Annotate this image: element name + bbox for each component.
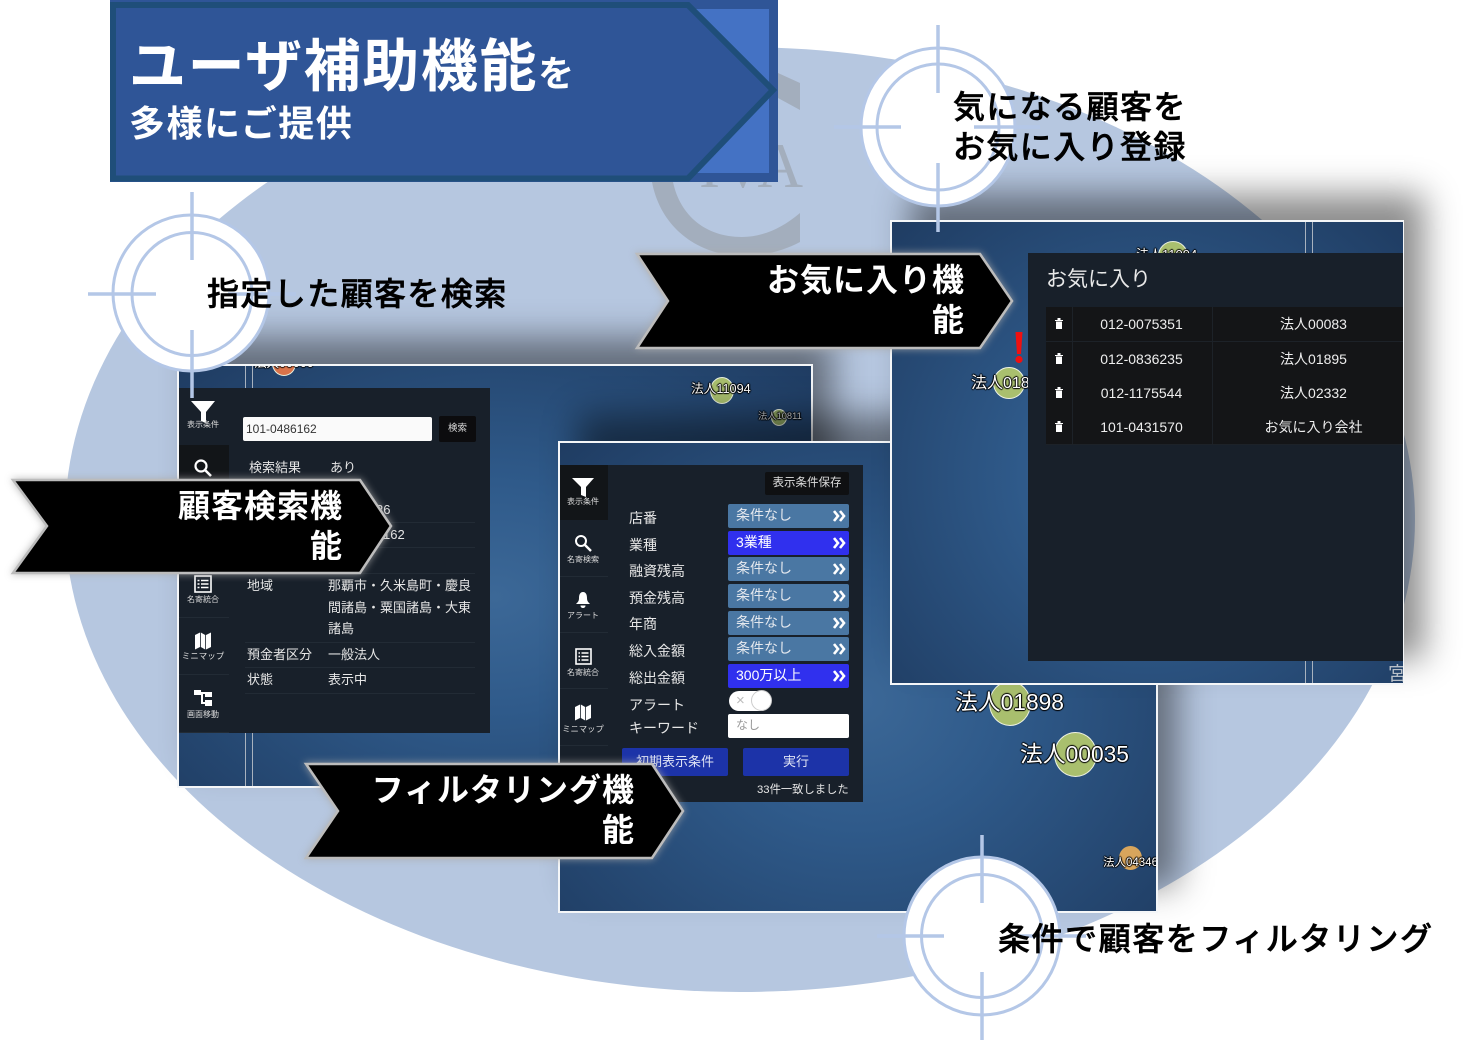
panel: filtering screenshot: アラート [629, 697, 685, 713]
map road lines [245, 364, 253, 789]
toggle knob [751, 690, 772, 711]
panel: filtering screenshot: 総出金額 [629, 670, 685, 686]
map marker: orange [272, 351, 296, 376]
icon: funnel [572, 478, 594, 497]
sidebar dividers [179, 617, 229, 618]
callout: favourites: お気に入り登録 [953, 129, 1187, 165]
icon: map [195, 632, 211, 650]
map label: 法人01898: 法人01898 [955, 689, 1064, 715]
favourites row 3 [1046, 376, 1403, 411]
search button: 検索 [448, 423, 467, 434]
map marker: 法人01898 [989, 681, 1031, 726]
search input [243, 417, 432, 441]
favourites row 2 [1046, 342, 1403, 377]
target circle: filtering [904, 835, 1086, 1040]
panel: filtering screenshot: 条件なし [736, 560, 792, 576]
filter option buttons [728, 504, 849, 528]
sidebar label: display conditions: 表示条件 [567, 497, 599, 506]
map label: 法人018: 法人01895 [971, 375, 1048, 392]
sidebar label: alert: アラート [567, 611, 599, 620]
sidebar label: name merge: 名寄統合 [567, 668, 599, 677]
favourites row 2: 012-0836235 [1100, 351, 1183, 367]
sidebar label: minimap: ミニマップ [562, 724, 604, 734]
panel: customer search screenshot: 地域 [247, 578, 273, 593]
search input: 101-0486162 [246, 422, 317, 436]
reset button: 初期表示条件 [636, 754, 714, 769]
panel: filtering screenshot: 預金残高 [629, 590, 685, 606]
map marker: 法人10811 [771, 409, 787, 426]
map marker: top [1158, 241, 1188, 271]
panel: filtering screenshot: 業種 [629, 537, 657, 553]
filter option buttons: 条件なし [736, 507, 792, 523]
favourites row 3: 法人02332 [1280, 385, 1347, 401]
title sub text: 多様にご提供 [129, 103, 353, 144]
favourites row 4 [1046, 410, 1403, 445]
icon: list [194, 575, 212, 593]
filter sidebar active item [560, 465, 608, 520]
keyword input [728, 714, 849, 738]
callout: search: 指定した顧客を検索 [207, 276, 508, 312]
map road lines [1305, 220, 1313, 690]
favourites row 4: 101-0431570 [1100, 419, 1183, 435]
title banner [110, 0, 778, 182]
callout: filtering: 条件で顧客をフィルタリング [998, 921, 1434, 957]
icon: search [575, 535, 592, 552]
panel: customer search screenshot: 表示中 [328, 672, 367, 687]
keyword input: なし [736, 718, 760, 732]
alert exclamation [1015, 332, 1023, 364]
panel: customer search screenshot: あり [330, 460, 356, 475]
alert toggle: × [736, 692, 745, 709]
panel: filtering screenshot: 総入金額 [629, 643, 685, 659]
icon: list [575, 648, 592, 665]
panel: customer search screenshot: 諸島 [328, 621, 354, 636]
panel: filtering screenshot [558, 441, 1158, 913]
favourites column separators [1072, 307, 1073, 445]
ribbon text [178, 488, 343, 564]
map label: top: 法人11094 [1136, 247, 1197, 262]
panel: customer search screenshot: 26 [376, 502, 390, 517]
sidebar label: display conditions: 表示条件 [187, 420, 219, 429]
panel: filtering screenshot: 条件なし [736, 614, 792, 630]
reset button [622, 748, 728, 776]
icon: funnel [191, 401, 215, 423]
favourites row 4: お気に入り会社 [1264, 419, 1362, 435]
sidebar label: name merge: 名寄統合 [187, 595, 219, 604]
ribbon text: 能 [310, 528, 343, 564]
panel: filtering screenshot: 条件なし [736, 587, 792, 603]
ribbon: favourites [634, 248, 1017, 354]
map marker: 法人00035 [1054, 732, 1097, 777]
alert toggle [729, 691, 771, 711]
sidebar label: minimap: ミニマップ [182, 651, 224, 661]
panel: filtering screenshot: 条件なし [736, 640, 792, 656]
panel: customer search screenshot: 162 [383, 527, 405, 542]
panel: filtering screenshot: キーワード [629, 720, 699, 736]
icon: tree [194, 690, 212, 706]
map label: 法人10811: 法人10811 [758, 411, 802, 421]
favourites row 2: 法人01895 [1280, 351, 1347, 367]
ribbon: filtering [302, 758, 688, 864]
favourites row 1 [1046, 307, 1403, 342]
panel: customer search screenshot [177, 364, 813, 788]
favourites row 3: 012-1175544 [1101, 385, 1182, 401]
panel: favourites screenshot [890, 220, 1404, 685]
map label: 法人00035: 法人00035 [1020, 741, 1129, 767]
sidebar label: name search: 名寄検索 [567, 555, 599, 564]
panel: filtering screenshot: 融資残高 [629, 563, 685, 579]
sidebar dividers [560, 576, 608, 577]
favourites row 1: 法人00083 [1280, 316, 1347, 332]
save conditions button [765, 472, 849, 495]
panel: customer search screenshot: 状態 [247, 672, 273, 687]
ribbon text: お気に入り機 [767, 262, 965, 298]
map marker: 法人11094 [710, 377, 734, 404]
panel: filtering screenshot: 3業種 [736, 534, 772, 550]
favourites row 1: 012-0075351 [1100, 316, 1183, 332]
target circle: search [88, 192, 270, 398]
panel: customer search screenshot: 一般法人 [328, 647, 380, 662]
ribbon text [767, 262, 965, 338]
search result rows: 検索結果 [249, 460, 301, 475]
ribbon text: 能 [932, 302, 965, 338]
icon: search [194, 459, 212, 477]
callout: favourites: 気になる顧客を [953, 89, 1187, 125]
watermark logo [652, 73, 803, 253]
icon: map [575, 704, 591, 720]
callout: favourites [953, 89, 1187, 165]
search button [439, 416, 476, 442]
panel: filtering screenshot: 年商 [629, 616, 657, 632]
match count: 33件一致しました [757, 784, 849, 796]
filter labels: 店番 [629, 510, 657, 526]
ribbon: customer search [10, 474, 396, 580]
target circle: favourites [862, 25, 1014, 232]
map marker: 法人018 [993, 367, 1025, 399]
save conditions button: 表示条件保存 [772, 477, 842, 489]
watermark logo: IVA [699, 130, 803, 201]
favourites dialog [1028, 253, 1404, 661]
panel: customer search screenshot: 那覇市・久米島町・慶良 [328, 578, 471, 593]
sidebar label: screen move: 画面移動 [187, 710, 219, 719]
map label: 法人11094: 法人11094 [691, 382, 751, 396]
favourites title: お気に入り [1046, 268, 1151, 291]
map marker: 法人04346 [1119, 846, 1142, 870]
run button: 実行 [783, 754, 809, 769]
search dialog [178, 388, 490, 733]
title main text: ユーザ補助機能を [129, 35, 574, 99]
ribbon text: フィルタリング機 [372, 772, 635, 808]
panel: customer search screenshot: 間諸島・粟国諸島・大東 [328, 600, 471, 615]
panel: customer search screenshot: 預金者区分 [247, 647, 312, 662]
search sidebar active item [179, 445, 229, 505]
icon: bell [576, 592, 590, 608]
filter dialog [560, 465, 863, 802]
panel: filtering screenshot: 300万以上 [736, 667, 801, 683]
ribbon text [372, 772, 635, 848]
ribbon text: 能 [602, 812, 635, 848]
ribbon text: 顧客検索機 [178, 488, 343, 524]
run button [743, 748, 849, 776]
